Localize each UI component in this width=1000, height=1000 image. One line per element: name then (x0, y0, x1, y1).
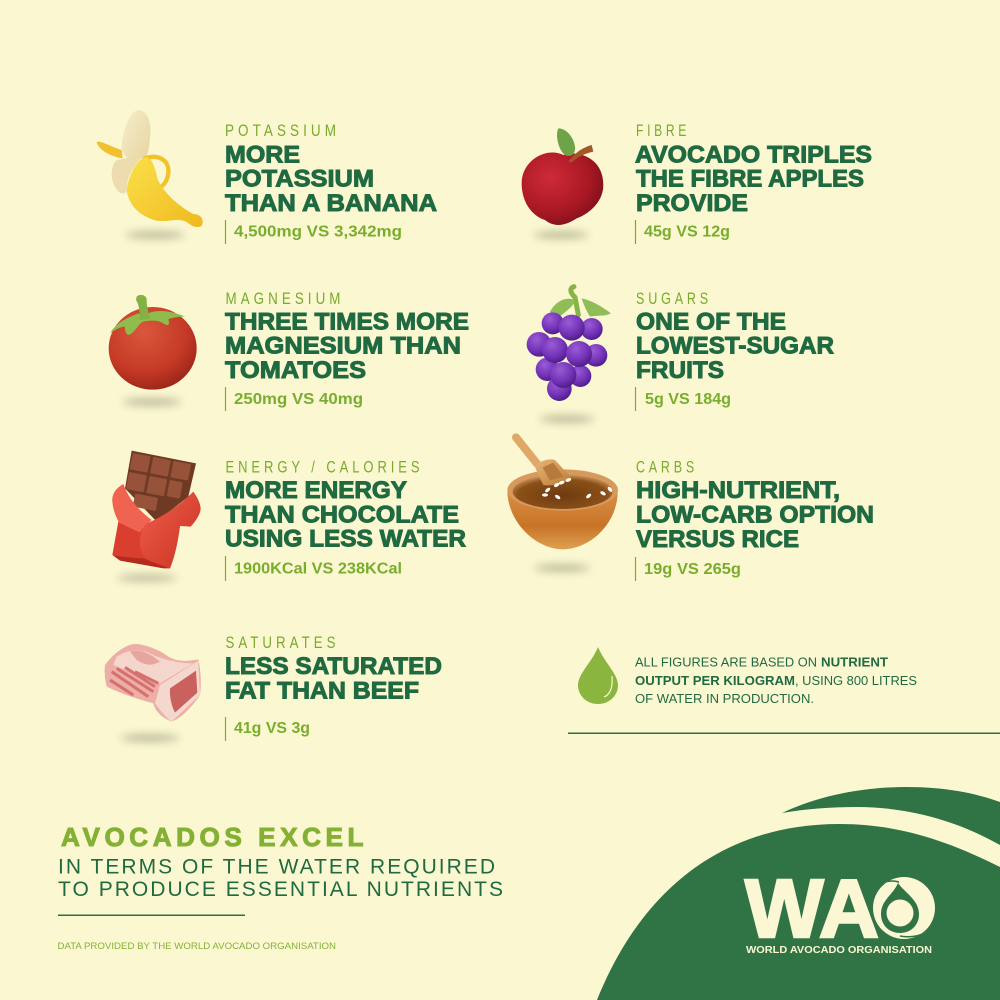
panel: carbs (507, 437, 874, 581)
logo: WORLD AVOCADO ORGANISATION (746, 944, 932, 956)
stat: sugars (636, 387, 731, 411)
stat: carbs (636, 557, 741, 581)
heading: less saturated fat: FAT THAN BEEF (225, 678, 419, 705)
label: magnesium: MAGNESIUM (226, 290, 344, 308)
panel: sugars (527, 287, 834, 422)
label: sugars: SUGARS (636, 290, 712, 308)
stat: fibre: 45g VS 12g (644, 224, 730, 241)
icon: chocolate bar (112, 451, 201, 581)
heading: three times more magnesium (225, 308, 469, 384)
heading: more potassium (225, 142, 437, 217)
heading: more energy than chocolate (225, 477, 466, 553)
icon: grapes (527, 287, 611, 422)
subtitle: IN TERMS OF THE WATER REQUIRED (58, 855, 495, 878)
stat: potassium: 4,500mg VS 3,342mg (234, 224, 402, 241)
icon: water drop (578, 647, 618, 704)
crescent (782, 787, 1000, 845)
heading: three times more magnesium: TOMATOES (225, 357, 366, 384)
note text: ALL FIGURES ARE BASED ON (635, 655, 817, 670)
stat: carbs: 19g VS 265g (644, 561, 741, 578)
stat: fibre (636, 220, 730, 244)
stat: saturates (226, 717, 310, 741)
note text: OUTPUT PER KILOGRAM (635, 673, 795, 688)
source note: DATA PROVIDED BY THE WORLD AVOCADO ORGANISATION (58, 941, 336, 952)
panel: potassium (97, 110, 437, 244)
label: carbs: CARBS (636, 459, 698, 477)
heading: lowest-sugar fruits: FRUITS (636, 357, 724, 384)
heading: low-carb option: HIGH-NUTRIENT, (636, 477, 840, 504)
heading: more potassium: MORE (225, 142, 300, 169)
heading: low-carb option (636, 477, 874, 553)
heading: avocado triples: PROVIDE (636, 190, 748, 217)
label: saturates: SATURATES (226, 634, 340, 652)
panel: methodology note (578, 647, 917, 706)
heading: three times more magnesium: THREE TIMES MORE (225, 308, 469, 335)
label: potassium: POTASSIUM (225, 122, 340, 140)
corner shape with logo (597, 787, 1000, 1000)
heading: avocado triples (635, 142, 872, 217)
heading: more potassium: POTASSIUM (225, 166, 374, 193)
subtitle (58, 855, 503, 901)
icon: apple (522, 128, 603, 238)
panel: fibre (522, 122, 872, 244)
note text: NUTRIENT (821, 655, 888, 670)
panel: energy (112, 451, 466, 581)
heading: avocado triples: THE FIBRE APPLES (636, 166, 864, 193)
heading: less saturated fat (225, 653, 442, 705)
icon: rice bowl (507, 437, 618, 571)
heading: less saturated fat: LESS SATURATED (225, 653, 442, 680)
heading: more energy than chocolate: THAN CHOCOLATE (225, 501, 459, 528)
note text: , USING 800 LITRES (795, 673, 917, 688)
label: fibre: FIBRE (636, 122, 690, 140)
note text: OF WATER IN PRODUCTION. (635, 691, 814, 706)
heading: lowest-sugar fruits (636, 308, 834, 384)
heading: low-carb option: LOW-CARB OPTION (636, 502, 874, 529)
stat: magnesium: 250mg VS 40mg (234, 391, 363, 408)
green arc (597, 824, 1000, 1000)
heading: more energy than chocolate: USING LESS WATER (225, 526, 466, 553)
heading: low-carb option: VERSUS RICE (636, 526, 799, 553)
icon: meat (105, 644, 201, 741)
stat: magnesium (226, 387, 363, 411)
stat: energy: 1900KCal VS 238KCal (234, 560, 402, 577)
panel: saturates (105, 634, 442, 741)
heading: more potassium: THAN A BANANA (225, 190, 437, 217)
stat: saturates: 41g VS 3g (234, 720, 310, 737)
title: avocados excel: AVOCADOS EXCEL (61, 822, 368, 852)
icon: banana (97, 110, 203, 238)
heading: lowest-sugar fruits: LOWEST-SUGAR (636, 333, 834, 360)
label: energy / calories: ENERGY / CALORIES (226, 459, 424, 477)
title block (58, 822, 503, 901)
subtitle: TO PRODUCE ESSENTIAL NUTRIENTS (58, 878, 503, 901)
stat: sugars: 5g VS 184g (645, 391, 731, 408)
heading: more energy than chocolate: MORE ENERGY (225, 477, 407, 504)
heading: lowest-sugar fruits: ONE OF THE (636, 308, 786, 335)
logo (745, 862, 935, 956)
icon: tomato (109, 295, 197, 405)
heading: avocado triples: AVOCADO TRIPLES (635, 142, 872, 169)
panel: magnesium (109, 290, 469, 411)
note text (635, 655, 917, 706)
heading: three times more magnesium: MAGNESIUM THAN (225, 333, 461, 360)
logo: WA (745, 862, 879, 955)
